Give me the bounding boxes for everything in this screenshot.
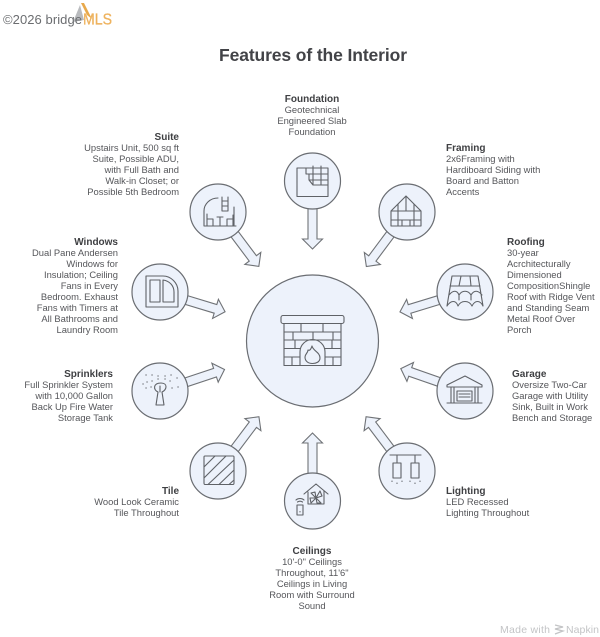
tile text: [94, 486, 179, 518]
foundation text: Foundation: [285, 94, 339, 105]
footer: made with napkin: Napkin: [566, 624, 599, 636]
arrow: tile: [226, 411, 267, 456]
watermark: bridgeMLS copyright: [3, 3, 112, 28]
panel: garage: [397, 359, 592, 423]
ceilings text: Ceilings in Living: [277, 578, 347, 589]
garage text: Bench and Storage: [512, 412, 592, 423]
sprinklers text: Full Sprinkler System: [24, 379, 113, 390]
foundation text: Geotechnical: [285, 104, 339, 115]
arrow: foundation: [302, 207, 322, 249]
framing text: [446, 143, 540, 197]
roofing text: [507, 237, 595, 335]
panel: suite: [84, 132, 267, 272]
footer: made with napkin: [500, 624, 599, 636]
icon: roofing: [447, 276, 483, 306]
icon: ceiling fan and remote: [296, 484, 328, 515]
arrow: garage: [397, 359, 444, 392]
garage text: Oversize Two-Car: [512, 379, 587, 390]
suite text: Walk-in Closet; or: [105, 175, 179, 186]
suite text: Suite, Possible ADU,: [92, 153, 179, 164]
sprinklers text: Back Up Fire Water: [32, 401, 113, 412]
suite text: Upstairs Unit, 500 sq ft: [84, 142, 179, 153]
ceilings text: 10'-0" Ceilings: [282, 556, 342, 567]
arrow: sprinklers: [182, 360, 228, 392]
icon: windows: [146, 276, 178, 307]
icon: framing: [391, 196, 421, 226]
foundation text: [277, 94, 347, 137]
framing text: Board and Batton: [446, 175, 519, 186]
title: Features of the Interior: [219, 45, 407, 65]
windows text: Windows for: [66, 258, 118, 269]
foundation text: Foundation: [289, 126, 335, 137]
ceilings text: Room with Surround: [269, 589, 355, 600]
garage text: Garage with Utility: [512, 390, 588, 401]
sprinklers text: with 10,000 Gallon: [34, 390, 113, 401]
roofing text: Metal Roof Over: [507, 313, 575, 324]
ceilings text: [269, 546, 355, 611]
panel: lighting: [358, 411, 530, 518]
roofing text: CompositionShingle: [507, 280, 590, 291]
footer: made with napkin: Made with: [500, 624, 550, 636]
icon: fireplace: [281, 316, 344, 366]
windows text: Fans with Timers at: [37, 302, 118, 313]
watermark: bridgeMLS copyright: MLS: [83, 12, 112, 28]
windows text: Bedroom. Exhaust: [41, 291, 118, 302]
sprinklers text: Storage Tank: [58, 412, 113, 423]
lighting text: LED Recessed: [446, 496, 509, 507]
windows text: [32, 237, 118, 335]
roofing text: Porch: [507, 324, 532, 335]
sprinklers text: [24, 369, 113, 423]
suite text: Possible 5th Bedroom: [87, 186, 179, 197]
arrow: suite: [226, 227, 267, 272]
sprinklers text: Sprinklers: [64, 369, 113, 380]
panel: windows: [32, 237, 228, 335]
windows text: Fans in Every: [61, 280, 118, 291]
lighting text: Lighting: [446, 486, 485, 497]
icon: tile: [204, 456, 234, 484]
windows text: Laundry Room: [56, 324, 118, 335]
windows text: Insulation; Ceiling: [44, 269, 118, 280]
panel: foundation: [277, 94, 347, 249]
icon: foundation: [297, 166, 328, 196]
center circle: fireplace: [246, 275, 378, 407]
suite text: with Full Bath and: [103, 164, 179, 175]
icon: suite: [204, 197, 236, 226]
tile text: Tile: [162, 486, 179, 497]
roofing text: and Standing Seam: [507, 302, 590, 313]
windows text: Dual Pane Andersen: [32, 247, 118, 258]
framing text: 2x6Framing with: [446, 153, 515, 164]
panel: roofing: [397, 237, 595, 335]
roofing text: Dimensioned: [507, 269, 562, 280]
framing text: Accents: [446, 186, 480, 197]
lighting text: Lighting Throughout: [446, 507, 530, 518]
tile text: Tile Throughout: [114, 507, 179, 518]
panel: sprinklers: [24, 360, 228, 423]
garage text: [512, 369, 592, 423]
icon: sprinkler: [143, 375, 178, 405]
garage text: Garage: [512, 369, 547, 380]
framing text: Framing: [446, 143, 485, 154]
suite text: Suite: [155, 132, 179, 143]
arrow: windows: [182, 290, 228, 321]
ceilings text: Sound: [298, 600, 326, 611]
windows text: All Bathrooms and: [41, 313, 118, 324]
roofing text: 30-year: [507, 247, 539, 258]
roofing text: Acrchitecturally: [507, 258, 571, 269]
garage text: Sink, Built in Work: [512, 401, 588, 412]
icon: pendant lights: [390, 455, 421, 484]
framing text: Hardiboard Siding with: [446, 164, 540, 175]
panel: ceilings: [269, 433, 355, 611]
panel: framing: [358, 143, 540, 272]
arrow: roofing: [397, 290, 443, 321]
ceilings text: Throughout, 11'6": [275, 567, 349, 578]
roofing text: Roofing: [507, 237, 545, 248]
arrow: ceilings: [302, 433, 322, 475]
arrow: framing: [358, 227, 399, 272]
suite text: [84, 132, 179, 197]
arrow: lighting: [358, 411, 399, 456]
watermark: bridgeMLS copyright: ©2026 bridge: [3, 12, 82, 27]
roofing text: Roof with Ridge Vent: [507, 291, 595, 302]
icon: garage: [447, 376, 482, 403]
panel: tile: [94, 411, 267, 518]
ceilings text: Ceilings: [293, 546, 332, 557]
foundation text: Engineered Slab: [277, 115, 347, 126]
tile text: Wood Look Ceramic: [94, 496, 179, 507]
windows text: Windows: [74, 237, 118, 248]
lighting text: [446, 486, 530, 518]
